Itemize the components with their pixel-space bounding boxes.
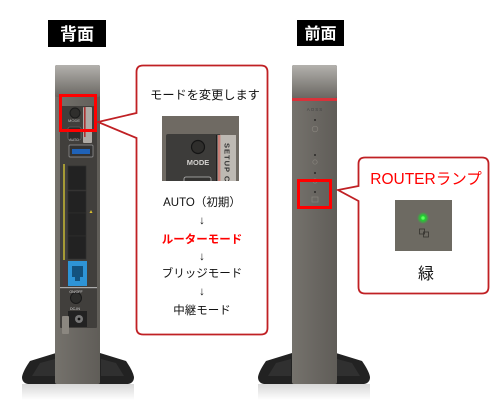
mode sequence: ↓ [199, 215, 205, 227]
lamp colour label: 緑 [418, 265, 434, 283]
stand [258, 353, 370, 400]
router: front view [258, 65, 370, 400]
mode sequence: ブリッジモード [162, 266, 242, 280]
heading: back: 背面 [60, 25, 94, 44]
router: back view: AUTO [69, 138, 79, 142]
stand [22, 353, 134, 400]
dc jack [68, 311, 87, 327]
callout: mode change [98, 66, 268, 334]
usb port [69, 145, 93, 157]
heading: front [297, 20, 344, 46]
aoss label: AOSS [307, 107, 323, 112]
heading: back [48, 20, 106, 47]
mode button [70, 108, 80, 118]
setup label [83, 107, 92, 143]
red stripe [292, 98, 337, 101]
mode sequence: ↓ [199, 251, 205, 263]
highlight: mode area [60, 96, 96, 130]
lan ports [68, 166, 86, 259]
router: back view: MODE [68, 118, 80, 123]
lamps [314, 119, 316, 193]
body [292, 65, 337, 384]
body [55, 65, 100, 384]
callout: router lamp [338, 158, 488, 294]
wan port [68, 261, 87, 286]
port panel [60, 106, 97, 328]
mode sequence [162, 196, 242, 317]
router: back view: ON/OFF [69, 290, 83, 294]
photo: mode button closeup: MODE [187, 158, 209, 167]
mode sequence: AUTO（初期） [163, 196, 241, 209]
callout text: instruction: モードを変更します [150, 87, 260, 102]
heading: front: 前面 [304, 24, 337, 43]
router: back view [22, 65, 134, 400]
highlight: router lamp [298, 180, 330, 208]
photo: mode button closeup [160, 116, 259, 189]
power switch [70, 292, 82, 304]
photo: green lamp [395, 200, 452, 251]
router: back view: DC-IN [70, 307, 80, 311]
callout title: ROUTERランプ [370, 170, 482, 188]
mode sequence: ↓ [199, 286, 205, 298]
photo: mode button closeup: SETUP C [222, 143, 232, 182]
cable clip [62, 316, 69, 334]
mode sequence: ルーターモード [162, 233, 242, 246]
mode sequence: 中継モード [173, 304, 231, 317]
